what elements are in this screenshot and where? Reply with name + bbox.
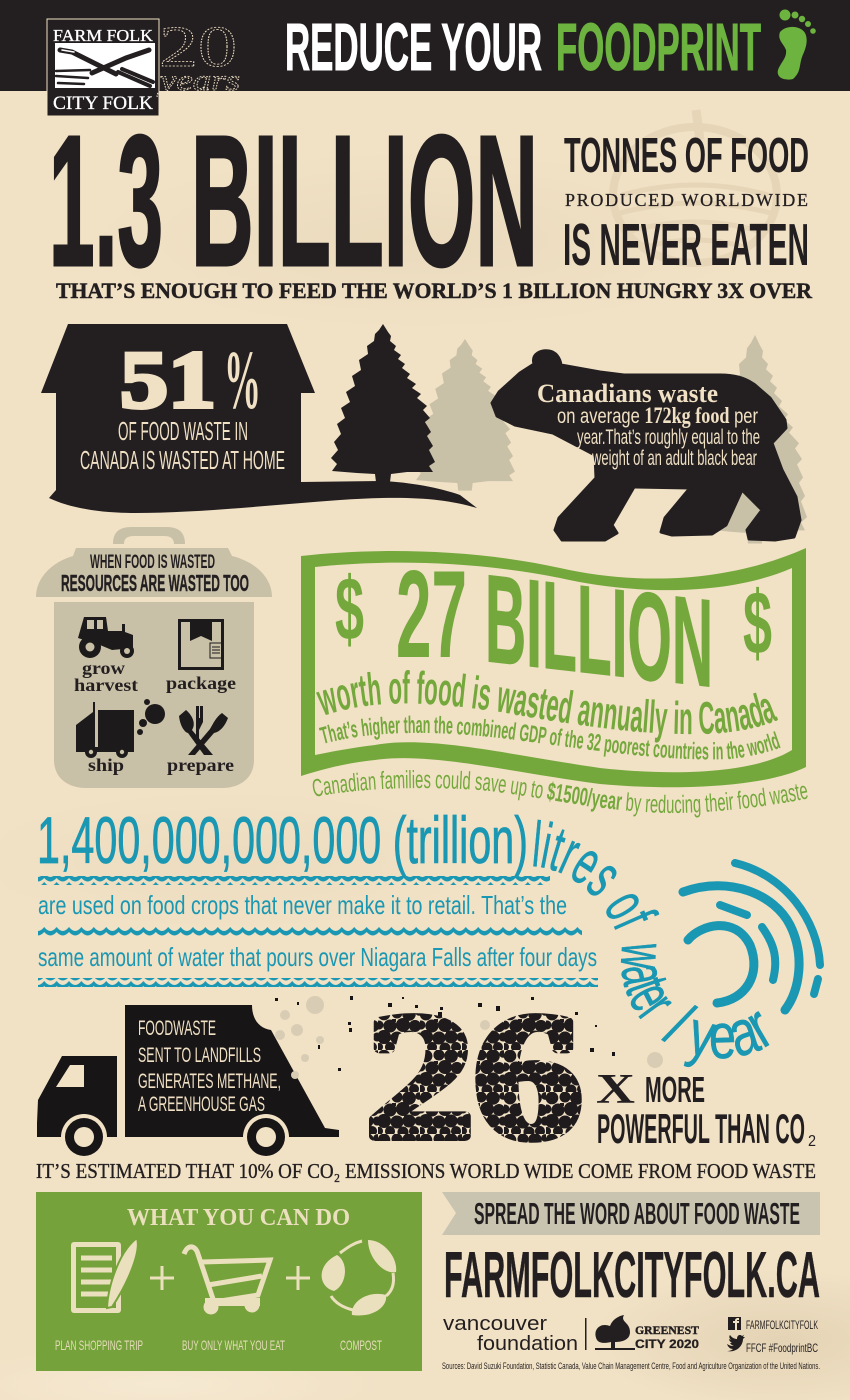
logo: vancouver foundation: vancouver — [443, 1313, 547, 1335]
dollar sign right: $ — [743, 574, 772, 674]
title: reduce your foodprint: REDUCE YOUR — [285, 10, 542, 85]
icon: truck wheels — [61, 1114, 289, 1160]
icon: house and ground swoosh — [41, 324, 477, 513]
text: x more — [596, 1067, 705, 1113]
headline: 1.3 billion: 1.3 — [49, 98, 163, 305]
label: harvest: harvest — [74, 675, 138, 695]
heading: what you can do: WHAT YOU CAN DO — [127, 1205, 350, 1231]
panel: spread the word — [442, 1192, 820, 1371]
banner frame — [301, 548, 806, 787]
wave divider — [38, 927, 582, 936]
logo: greenest city 2020: CITY 2020 — [635, 1337, 699, 1351]
logo: greenest city 2020 — [595, 1315, 699, 1351]
text: worth of food wasted: worth of food is wasted annually in Canada — [316, 670, 778, 743]
stat: 1.4 trillion: 1,400,000,000,000 (trillion) — [37, 803, 528, 877]
panel: methane truck — [37, 1005, 339, 1160]
stat: 51 percent: 51 — [120, 334, 216, 425]
text: families could save: Canadian families could save up to $1500/year by reducing their food waste — [312, 770, 808, 818]
plus — [150, 1266, 174, 1290]
icon: can body — [54, 602, 254, 788]
dollar sign left: $ — [335, 560, 364, 660]
wave divider — [38, 876, 550, 885]
text: x more: X — [596, 1067, 635, 1113]
icon: shopping list — [71, 1238, 138, 1313]
panel: trash can resources — [36, 527, 272, 788]
text: powerful than co2: 2 — [808, 1133, 816, 1150]
logo: farm folk city folk — [47, 19, 159, 116]
panel: water usage — [37, 803, 824, 1068]
subhead: enough to feed: THAT’S ENOUGH TO FEED THE WORLD’S 1 BILLION HUNGRY 3X OVER — [56, 278, 813, 303]
label: package: package — [166, 673, 236, 693]
panel: house with 51 percent: % — [224, 334, 261, 427]
icon: can lid — [36, 548, 272, 597]
headline: 1.3 billion — [49, 98, 538, 305]
label: ship: ship — [88, 755, 124, 775]
icon: twitter — [727, 1335, 745, 1351]
text: higher than GDP: That’s higher than the combined GDP of the 32 poorest countries in the world — [318, 716, 780, 760]
panel: what you can do — [36, 1192, 422, 1371]
stat: 26 made of circles: 26 — [366, 977, 582, 1175]
wave divider — [38, 978, 598, 987]
icon: package — [180, 620, 222, 668]
text: x more: MORE — [645, 1069, 705, 1110]
logo: vancouver foundation: foundation — [477, 1333, 578, 1355]
text: on average 172kg food per: on average 172kg food per — [557, 403, 758, 428]
label: buy only what you eat: BUY ONLY WHAT YOU EAT — [182, 1337, 285, 1353]
tree: grey behind house — [415, 339, 515, 491]
icon: tractor — [78, 617, 134, 658]
panel: house with 51 percent — [41, 324, 477, 513]
text: canada is wasted at home: CANADA IS WASTED AT HOME — [80, 445, 285, 475]
icon: bear silhouette — [492, 351, 800, 540]
panel: 27 billion wavy banner — [301, 546, 808, 818]
text: methane copy: A GREENHOUSE GAS — [138, 1093, 265, 1116]
text: niagara falls: same amount of water that pours over Niagara Falls after four days — [38, 942, 597, 972]
ribbon banner — [442, 1192, 820, 1235]
text: methane copy: FOODWASTE — [138, 1017, 216, 1040]
icon: shopping cart — [184, 1247, 270, 1312]
curved text: litres of water: litres of water — [533, 820, 672, 1020]
label: plan shopping trip: PLAN SHOPPING TRIP — [55, 1337, 143, 1353]
header band — [0, 0, 850, 91]
logo: vancouver foundation — [443, 1313, 578, 1355]
logo: 20 years dotted script: years — [156, 64, 240, 97]
tree: grey behind bear — [703, 335, 807, 544]
logo: greenest city 2020: GREENEST — [635, 1323, 699, 1337]
decoration: particles around the number — [275, 996, 663, 1079]
tree: dark fir — [331, 324, 435, 482]
text: used on food crops: are used on food crops that never make it to retail. That’s the — [38, 890, 567, 920]
label: prepare: prepare — [167, 755, 234, 775]
panel: black bear — [492, 351, 800, 540]
icon: truck window — [56, 1065, 84, 1087]
logo: 20 years dotted script: 20 — [159, 14, 237, 79]
text: methane copy: GENERATES METHANE, — [138, 1070, 281, 1093]
stat: 27: 27 — [396, 546, 467, 684]
text: of food waste in: OF FOOD WASTE IN — [118, 416, 248, 446]
icon: can handle — [113, 527, 185, 544]
icon: crossed utensils — [179, 706, 228, 755]
icon: water ripples — [683, 863, 820, 1010]
icon: compost leaves — [322, 1240, 396, 1315]
text: canadians waste: Canadians waste — [537, 379, 718, 408]
icon: truck with exhaust — [76, 699, 165, 758]
plus — [286, 1266, 310, 1290]
text: methane copy — [138, 1017, 281, 1116]
text: methane copy: SENT TO LANDFILLS — [138, 1044, 261, 1067]
logo: 20 years dotted script — [156, 14, 240, 97]
curved text: per year: / year — [661, 1004, 770, 1068]
label: compost: COMPOST — [340, 1337, 382, 1353]
text: when food is wasted: WHEN FOOD IS WASTED — [90, 552, 215, 573]
icon: green footprint — [778, 10, 816, 80]
label: grow: grow — [82, 658, 125, 678]
logo: farm folk city folk: FARM FOLK — [53, 26, 154, 45]
logo: farm folk city folk: CITY FOLK — [53, 93, 153, 114]
stat: 51 percent — [120, 334, 261, 427]
text: resources are wasted too: RESOURCES ARE WASTED TOO — [61, 570, 249, 596]
watermark: faint apple — [613, 110, 777, 263]
icon: facebook — [728, 1317, 741, 1330]
icon: garbage truck — [37, 1005, 339, 1137]
text: produced worldwide: PRODUCED WORLDWIDE — [565, 190, 808, 210]
